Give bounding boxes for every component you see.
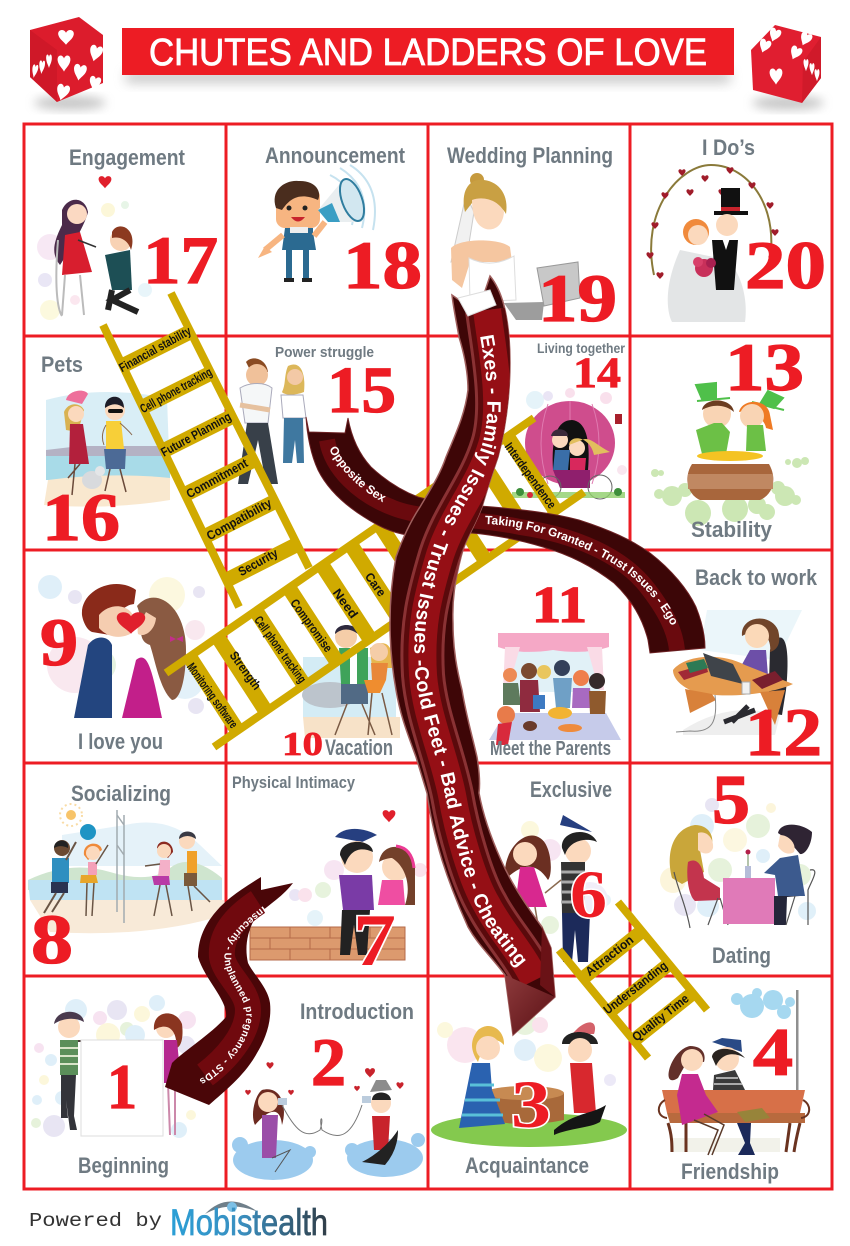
illustration: kissing couple [38,575,205,718]
logo: Mobistealth: Mobistealth [170,1202,328,1243]
illustration: beach volleyball socializing [28,804,224,933]
number 8: 8 [31,902,73,979]
number 19: 19 [538,260,617,336]
chute: opposite sex to taking for granted [306,416,706,654]
chute text: Opposite Sex [330,446,386,502]
label: Exclusive: Exclusive [530,777,612,802]
number 5: 5 [712,762,750,839]
number 4: 4 [753,1014,793,1090]
label: Acquaintance: Acquaintance [465,1153,589,1178]
number 18: 18 [343,227,422,303]
ladder: from 16 up to 17 [103,293,309,607]
rung labels: Need [330,586,361,621]
illustration: family table meeting the parents [489,633,621,745]
label: Socializing: Socializing [71,781,171,806]
label: Back to work: Back to work [695,565,818,590]
label: I Do's: I Do’s [702,135,755,160]
illustration: engagement couple [37,176,152,320]
illustration: exclusive couple holding hands [505,815,611,962]
die: left [30,17,106,110]
number 20: 20 [745,227,826,303]
rung labels: Understanding [601,959,670,1017]
illustration: friends on a bench [659,988,809,1155]
label: Physical Intimacy: Physical Intimacy [232,773,355,792]
label: Meet the Parents: Meet the Parents [490,738,611,760]
label: Announcement: Announcement [265,143,406,168]
label: Beginning: Beginning [78,1153,169,1178]
label: Dating: Dating [712,943,771,968]
label: Pets: Pets [41,352,83,377]
rung labels: Commitment [184,456,251,501]
label: Wedding Planning: Wedding Planning [447,143,613,168]
rung labels: Quality Time [629,991,692,1044]
label: Introduction: Introduction [300,999,414,1024]
number 10: 10 [282,726,323,763]
illustration: vacation couple on beach [302,625,400,738]
number 12: 12 [745,694,822,770]
label: Vacation: Vacation [325,735,393,760]
rung labels: Care [362,570,389,599]
die: right [751,25,824,110]
rung labels: Cell phone tracking [138,365,214,416]
chute text: Taking For Granted - Trust Issues - Ego [485,516,676,625]
illustration: dating couple at table [660,798,816,928]
illustration: arguing couple [238,358,306,484]
rung labels [117,324,280,579]
rung labels [184,440,559,731]
rung labels: Cell phone tracking [251,614,309,686]
number 7: 7 [353,900,396,982]
rung labels: Financial stability [117,324,193,375]
label: I love you: I love you [78,729,163,754]
label: Friendship: Friendship [681,1159,779,1184]
number 17: 17 [143,222,218,298]
number 2: 2 [311,1024,346,1100]
number 15: 15 [327,354,396,427]
illustration: bride at laptop [451,173,580,320]
number 3: 3 [511,1066,551,1142]
rung labels: Compatibility [204,496,274,543]
number 14: 14 [573,350,621,397]
illustration: couple on brick wall [250,810,427,960]
chute: main long slide [389,274,556,1036]
illustration: couple in carriage [512,388,627,499]
rung labels: Attraction [583,933,636,979]
number 13: 13 [725,329,804,405]
title banner [122,28,734,82]
rung labels [583,933,692,1044]
illustration: announcement with megaphone [258,165,375,280]
footer: powered by: Powered by [29,1210,162,1232]
illustration: boy and girl beside a blank card [31,995,196,1138]
rung labels: Interdependence [502,440,559,511]
rung labels: Strength [227,649,264,693]
ladder: from 10 up to 14 [166,418,584,747]
label: Power struggle: Power struggle [275,344,374,361]
chute: insecurity slide [165,877,293,1105]
illustration: woman working at desk [673,610,802,735]
number 9: 9 [40,604,78,680]
rung labels: Security [236,546,280,579]
rung labels: Compromise [287,596,335,655]
number 6: 6 [570,856,607,932]
illustration: wedding couple under arch [646,165,779,322]
number 1: 1 [107,1051,137,1122]
illustration: couple with dog on the beach [44,391,170,507]
number 16: 16 [42,479,120,555]
illustration: leprechauns with pot of gold [651,383,809,526]
ladder: from 3 up to 6 [559,902,707,1058]
title: CHUTES AND LADDERS OF LOVE [149,32,707,74]
label: Living together: Living together [537,340,625,356]
chute text: Exes - Family Issues - Trust Issues -Cold Feet - Bad Advice - Cheating [414,334,526,968]
rung labels: Future Planning [159,409,234,460]
number 11: 11 [532,577,587,634]
illustration: acquaintance couple at tree stump [431,1011,627,1147]
label: Stability: Stability [691,517,773,542]
chute text: Insecurity - Unplanned pregnancy - STDs [200,906,265,1084]
illustration: kids on clouds with string phone [232,1062,425,1180]
label: Engagement: Engagement [69,145,186,170]
bride gown over slide top [458,290,496,316]
rung labels: Monitoring software [184,660,241,731]
